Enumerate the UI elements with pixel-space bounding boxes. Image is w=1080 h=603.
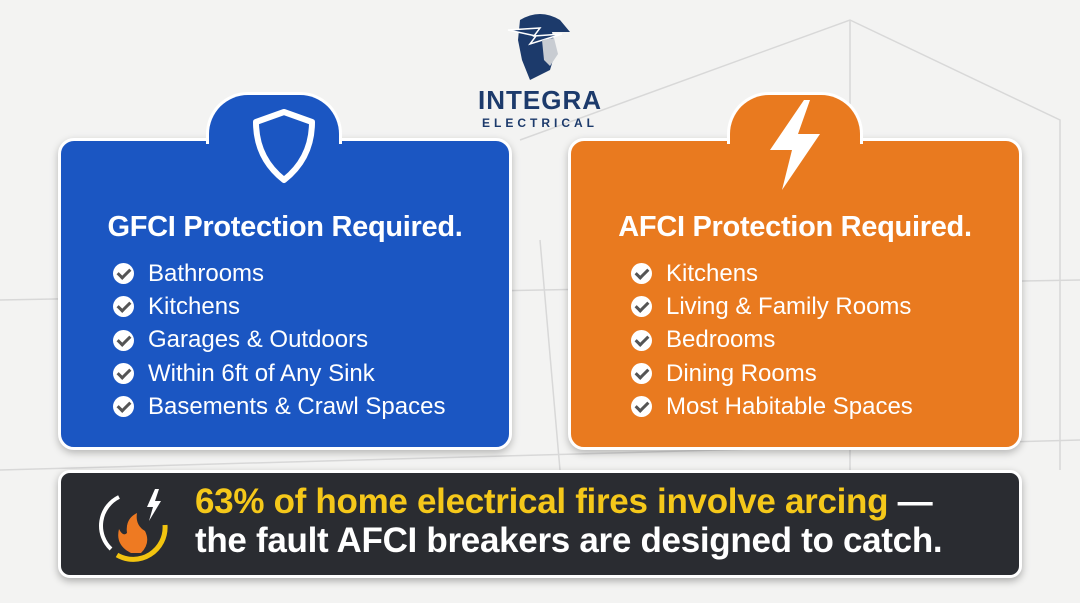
panel: AFCI	[568, 138, 1022, 450]
list: Most Habitable Spaces	[666, 393, 913, 420]
icon: lightning	[770, 100, 820, 190]
list: Bedrooms	[666, 326, 775, 353]
list: Kitchens	[666, 260, 758, 287]
heading: GFCI Protection Required.	[107, 211, 463, 243]
icon: shield	[253, 109, 315, 184]
callout bar	[58, 470, 1022, 578]
panel: GFCI tab	[206, 92, 342, 144]
list: Dining Rooms	[666, 360, 817, 387]
heading: AFCI Protection Required.	[618, 211, 972, 243]
panel: AFCI tab	[727, 92, 863, 144]
list: Kitchens	[148, 293, 240, 320]
callout text	[195, 482, 942, 560]
list	[631, 260, 913, 420]
logo: INTEGRA	[478, 85, 602, 115]
callout text: the fault AFCI breakers are designed to catch.	[195, 521, 942, 560]
list: Garages & Outdoors	[148, 326, 368, 353]
list: Bathrooms	[148, 260, 264, 287]
panel: GFCI	[58, 138, 512, 450]
list: Living & Family Rooms	[666, 293, 911, 320]
list: Basements & Crawl Spaces	[148, 393, 445, 420]
text: ELECTRICAL	[482, 116, 598, 130]
list: Within 6ft of Any Sink	[148, 360, 375, 387]
list	[113, 260, 445, 420]
callout text: 63% of home electrical fires involve arcing —	[195, 482, 932, 521]
icon: fire arc	[99, 489, 168, 562]
logo	[478, 14, 602, 130]
